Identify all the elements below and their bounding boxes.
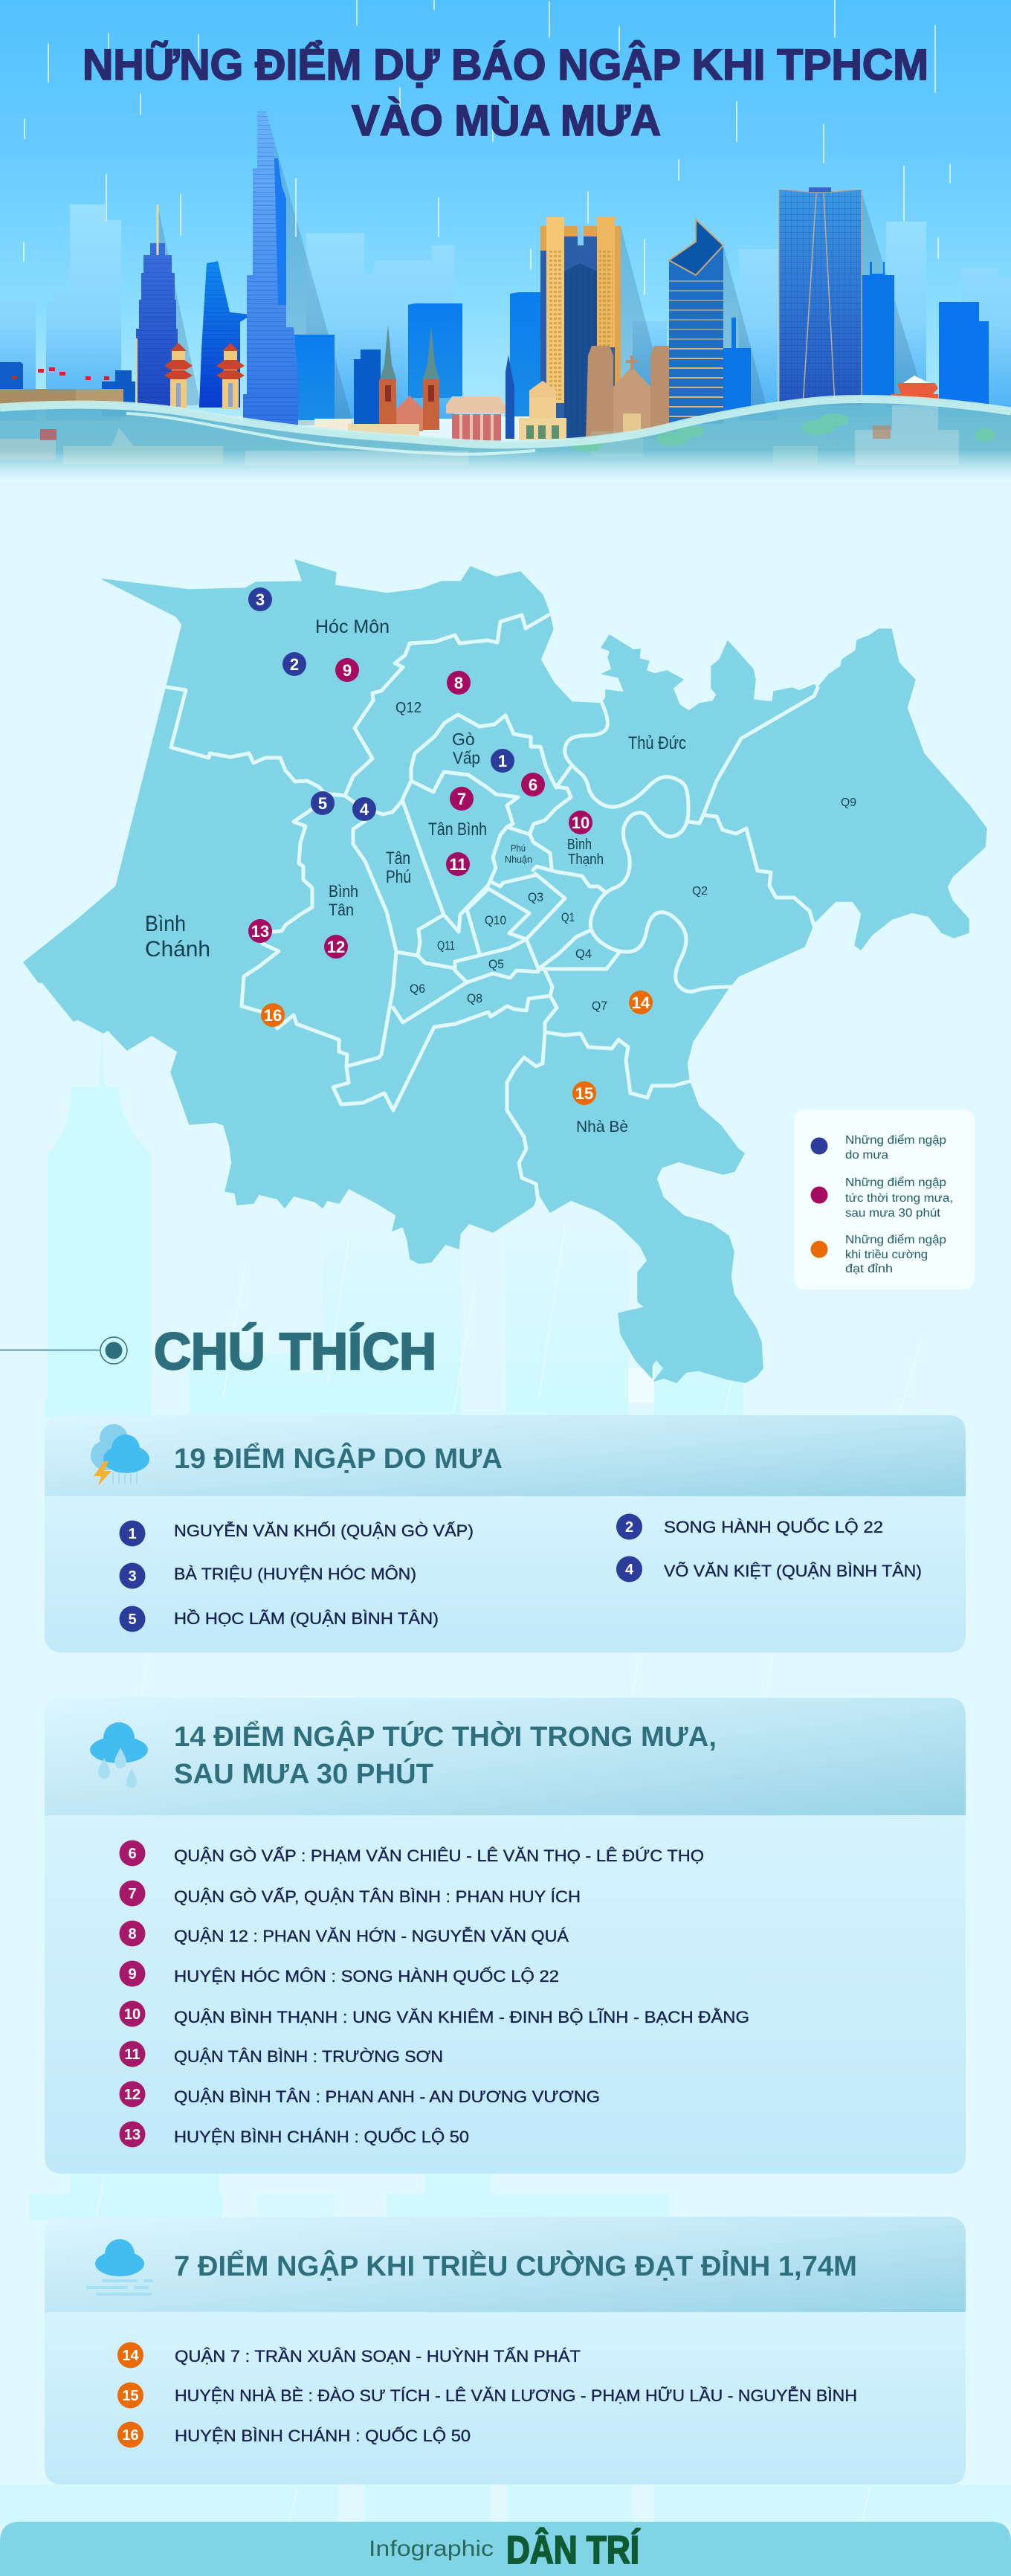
credit text: Infographic bbox=[369, 2537, 494, 2561]
list item 8: QUẬN 12 : PHAN VĂN HỚN - NGUYỄN VĂN QUÁ bbox=[174, 1926, 569, 1945]
panel header background bbox=[45, 1415, 966, 1496]
diamond crown tower bbox=[669, 219, 723, 424]
district labels: Tân bbox=[386, 849, 410, 869]
numbered flood point markers: 13 bbox=[251, 922, 269, 941]
map of Ho Chi Minh City districts bbox=[24, 560, 986, 1382]
panel header background bbox=[45, 2217, 966, 2312]
list item 4: 4 bbox=[625, 1562, 634, 1578]
district labels: Phú bbox=[511, 843, 526, 854]
panel heading bbox=[174, 1719, 717, 1790]
panel body background bbox=[45, 1496, 966, 1652]
footer bar bbox=[0, 2522, 1011, 2576]
list item 15: 15 bbox=[122, 2388, 139, 2404]
list item 10 bbox=[119, 2000, 749, 2027]
Vietcombank tower bbox=[136, 205, 178, 409]
district labels: Hóc Môn bbox=[315, 616, 390, 637]
list item 12: QUẬN BÌNH TÂN : PHAN ANH - AN DƯƠNG VƯƠNG bbox=[174, 2087, 600, 2106]
list item 6 bbox=[119, 1840, 704, 1867]
water crest bbox=[0, 399, 1011, 445]
list item 8 bbox=[119, 1920, 569, 1947]
red-roofed pagoda bbox=[891, 376, 939, 400]
map land bbox=[24, 560, 986, 1382]
map legend: Những điểm ngập bbox=[845, 1176, 946, 1189]
list item 15 bbox=[117, 2383, 857, 2408]
list item 13 bbox=[119, 2121, 469, 2148]
numbered flood point markers: 4 bbox=[360, 800, 369, 819]
numbered flood point markers: 7 bbox=[457, 790, 466, 808]
list item 6: QUẬN GÒ VẤP : PHẠM VĂN CHIÊU - LÊ VĂN THỌ - LÊ ĐỨC THỌ bbox=[174, 1846, 704, 1865]
list item 13: 13 bbox=[124, 2127, 140, 2143]
list item 9 bbox=[119, 1960, 559, 1987]
district labels: Gò bbox=[452, 730, 475, 749]
numbered flood point markers: 1 bbox=[498, 752, 507, 770]
map legend: Những điểm ngập bbox=[845, 1234, 946, 1246]
list item 6: 6 bbox=[128, 1846, 137, 1862]
list item 13: HUYỆN BÌNH CHÁNH : QUỐC LỘ 50 bbox=[174, 2127, 469, 2146]
section heading: chú thích: CHÚ THÍCH bbox=[154, 1322, 436, 1380]
list item 2: 2 bbox=[625, 1519, 633, 1536]
brown gothic cathedral bbox=[586, 346, 676, 439]
numbered flood point markers: 2 bbox=[290, 655, 299, 674]
panel: 7 high tide flood points bbox=[45, 2217, 966, 2485]
Saigon Notre-Dame cathedral bbox=[379, 325, 439, 431]
map legend: Những điểm ngập bbox=[845, 1134, 946, 1147]
numbered flood point markers: 8 bbox=[454, 674, 463, 692]
Bitexco tower bbox=[199, 261, 252, 408]
district labels: Q10 bbox=[485, 913, 506, 927]
district labels: Vấp bbox=[453, 748, 480, 767]
numbered flood point markers: 12 bbox=[327, 938, 345, 956]
list item 3 bbox=[119, 1563, 416, 1588]
district labels bbox=[145, 616, 856, 1136]
numbered flood point markers: 5 bbox=[318, 794, 327, 813]
mid blue buildings bbox=[0, 262, 989, 439]
district labels: Q1 bbox=[561, 910, 575, 924]
district labels: Chánh bbox=[145, 937, 210, 962]
rain streaks bbox=[24, 0, 950, 294]
pagoda towers bbox=[164, 343, 245, 409]
list item 8: 8 bbox=[128, 1926, 137, 1942]
Landmark 81 tower bbox=[243, 112, 298, 428]
icon: storm cloud bbox=[91, 1424, 149, 1486]
list item 3: 3 bbox=[128, 1568, 137, 1585]
list item 4: VÕ VĂN KIỆT (QUẬN BÌNH TÂN) bbox=[664, 1562, 922, 1580]
numbered flood point markers: 10 bbox=[572, 814, 590, 832]
list item 14 bbox=[117, 2342, 581, 2368]
Reunification palace and low white building bbox=[314, 396, 506, 442]
panel body background bbox=[45, 2312, 966, 2485]
tan government building with flags bbox=[0, 367, 123, 409]
list item 12 bbox=[119, 2081, 600, 2108]
list item 5: HỒ HỌC LÃM (QUẬN BÌNH TÂN) bbox=[174, 1609, 439, 1628]
panel heading: SAU MƯA 30 PHÚT bbox=[174, 1757, 433, 1790]
list item 11 bbox=[119, 2041, 443, 2067]
list item 7 bbox=[119, 1880, 581, 1907]
district labels: Tân Bình bbox=[428, 820, 487, 840]
tallest glass tower bbox=[779, 187, 862, 446]
district labels: Q3 bbox=[528, 890, 543, 904]
small gold temple bbox=[519, 381, 566, 440]
district labels: Thủ Đức bbox=[628, 733, 686, 753]
submerged ghost buildings and palms bbox=[0, 405, 995, 466]
faint city silhouette background bbox=[0, 1030, 1011, 2525]
list item 14: 14 bbox=[122, 2348, 139, 2364]
list item 5 bbox=[119, 1606, 439, 1632]
list item 10: 10 bbox=[124, 2006, 140, 2023]
logo: Dân Trí: DÂN TRÍ bbox=[506, 2527, 640, 2572]
title: NHỮNG ĐIỂM DỰ BÁO NGẬP KHI TPHCM bbox=[83, 41, 928, 89]
district labels: Nhà Bè bbox=[576, 1118, 628, 1136]
district labels: Q4 bbox=[575, 947, 592, 961]
panel heading: 19 ĐIỂM NGẬP DO MƯA bbox=[174, 1441, 503, 1475]
map legend bbox=[794, 1110, 975, 1289]
district labels: Phú bbox=[386, 867, 411, 887]
numbered flood point markers: 14 bbox=[632, 994, 650, 1012]
district labels: Nhuận bbox=[505, 854, 532, 865]
list item 9: HUYỆN HÓC MÔN : SONG HÀNH QUỐC LỘ 22 bbox=[174, 1966, 559, 1986]
map legend: khi triều cường bbox=[845, 1249, 928, 1261]
district labels: Bình bbox=[145, 912, 186, 936]
list item 7: QUẬN GÒ VẤP, QUẬN TÂN BÌNH : PHAN HUY ÍCH bbox=[174, 1887, 581, 1906]
list item 3: BÀ TRIỆU (HUYỆN HÓC MÔN) bbox=[174, 1565, 416, 1583]
numbered flood point markers: 3 bbox=[256, 590, 265, 609]
list item 16: HUYỆN BÌNH CHÁNH : QUỐC LỘ 50 bbox=[175, 2426, 471, 2445]
district labels: Bình bbox=[567, 837, 592, 853]
panel body background bbox=[45, 1815, 966, 2174]
icon: rain cloud with drops bbox=[90, 1722, 148, 1788]
numbered flood point markers: 15 bbox=[575, 1084, 593, 1103]
district labels: Q9 bbox=[841, 796, 856, 809]
gold twin tower bbox=[540, 217, 621, 439]
list item 7: 7 bbox=[128, 1886, 137, 1902]
title bbox=[83, 41, 928, 145]
list item 2: SONG HÀNH QUỐC LỘ 22 bbox=[664, 1517, 883, 1536]
list item 11: 11 bbox=[124, 2047, 140, 2063]
district labels: Q11 bbox=[437, 938, 455, 953]
map legend: sau mưa 30 phút bbox=[845, 1207, 941, 1220]
panel header background bbox=[45, 1698, 966, 1815]
district labels: Thạnh bbox=[568, 851, 604, 868]
panel: 19 rain flood points bbox=[45, 1415, 966, 1652]
list item 16 bbox=[117, 2421, 471, 2448]
title: VÀO MÙA MƯA bbox=[352, 97, 661, 145]
list item 1 bbox=[119, 1520, 474, 1547]
distant buildings bbox=[0, 205, 1011, 420]
numbered flood point markers: 6 bbox=[529, 776, 537, 794]
list item 1: 1 bbox=[128, 1526, 137, 1542]
list item 15: HUYỆN NHÀ BÈ : ĐÀO SƯ TÍCH - LÊ VĂN LƯƠNG - PHẠM HỮU LẦU - NGUYỄN BÌNH bbox=[175, 2386, 857, 2405]
district borders and rivers bbox=[167, 615, 818, 1202]
header illustration: rainy city skyline bbox=[0, 0, 1011, 486]
numbered flood point markers bbox=[248, 587, 653, 1105]
district labels: Tân bbox=[329, 901, 354, 919]
map legend: do mưa bbox=[845, 1149, 888, 1162]
district labels: Bình bbox=[329, 882, 358, 901]
list item 4 bbox=[616, 1556, 922, 1582]
list item 10: QUẬN BÌNH THẠNH : UNG VĂN KHIÊM - ĐINH BỘ LĨNH - BẠCH ĐẰNG bbox=[174, 2008, 749, 2026]
numbered flood point markers: 9 bbox=[343, 661, 352, 680]
district labels: Q7 bbox=[592, 999, 607, 1013]
list item 14: QUẬN 7 : TRẦN XUÂN SOẠN - HUỲNH TẤN PHÁT bbox=[175, 2347, 581, 2366]
section heading: chú thích bbox=[0, 1322, 436, 1380]
district labels: Q2 bbox=[692, 885, 708, 898]
panel heading: 7 ĐIỂM NGẬP KHI TRIỀU CƯỜNG ĐẠT ĐỈNH 1,74M bbox=[174, 2249, 857, 2282]
panel heading: 14 ĐIỂM NGẬP TỨC THỜI TRONG MƯA, bbox=[174, 1719, 717, 1753]
list item 16: 16 bbox=[122, 2427, 139, 2444]
list item 12: 12 bbox=[124, 2087, 140, 2103]
map legend: đạt đỉnh bbox=[845, 1263, 893, 1275]
list item 2 bbox=[616, 1514, 883, 1539]
list item 9: 9 bbox=[128, 1966, 137, 1983]
list item 11: QUẬN TÂN BÌNH : TRƯỜNG SƠN bbox=[174, 2047, 443, 2066]
fade into page bbox=[0, 451, 1011, 480]
district labels: Q12 bbox=[395, 700, 421, 716]
numbered flood point markers: 11 bbox=[449, 855, 467, 874]
numbered flood point markers: 16 bbox=[264, 1006, 282, 1025]
district labels: Q6 bbox=[410, 982, 425, 996]
map legend: tức thời trong mưa, bbox=[845, 1192, 953, 1205]
cast shadows bbox=[158, 112, 926, 425]
panel: 14 instant flood points bbox=[45, 1698, 966, 2174]
sky bbox=[0, 0, 1011, 416]
flood water bbox=[0, 396, 1011, 483]
icon: cloud with tide lines bbox=[86, 2239, 153, 2296]
list item 5: 5 bbox=[128, 1611, 137, 1628]
district labels: Q8 bbox=[467, 991, 482, 1005]
list item 1: NGUYỄN VĂN KHỐI (QUẬN GÒ VẤP) bbox=[174, 1521, 474, 1540]
district labels: Q5 bbox=[488, 957, 504, 971]
